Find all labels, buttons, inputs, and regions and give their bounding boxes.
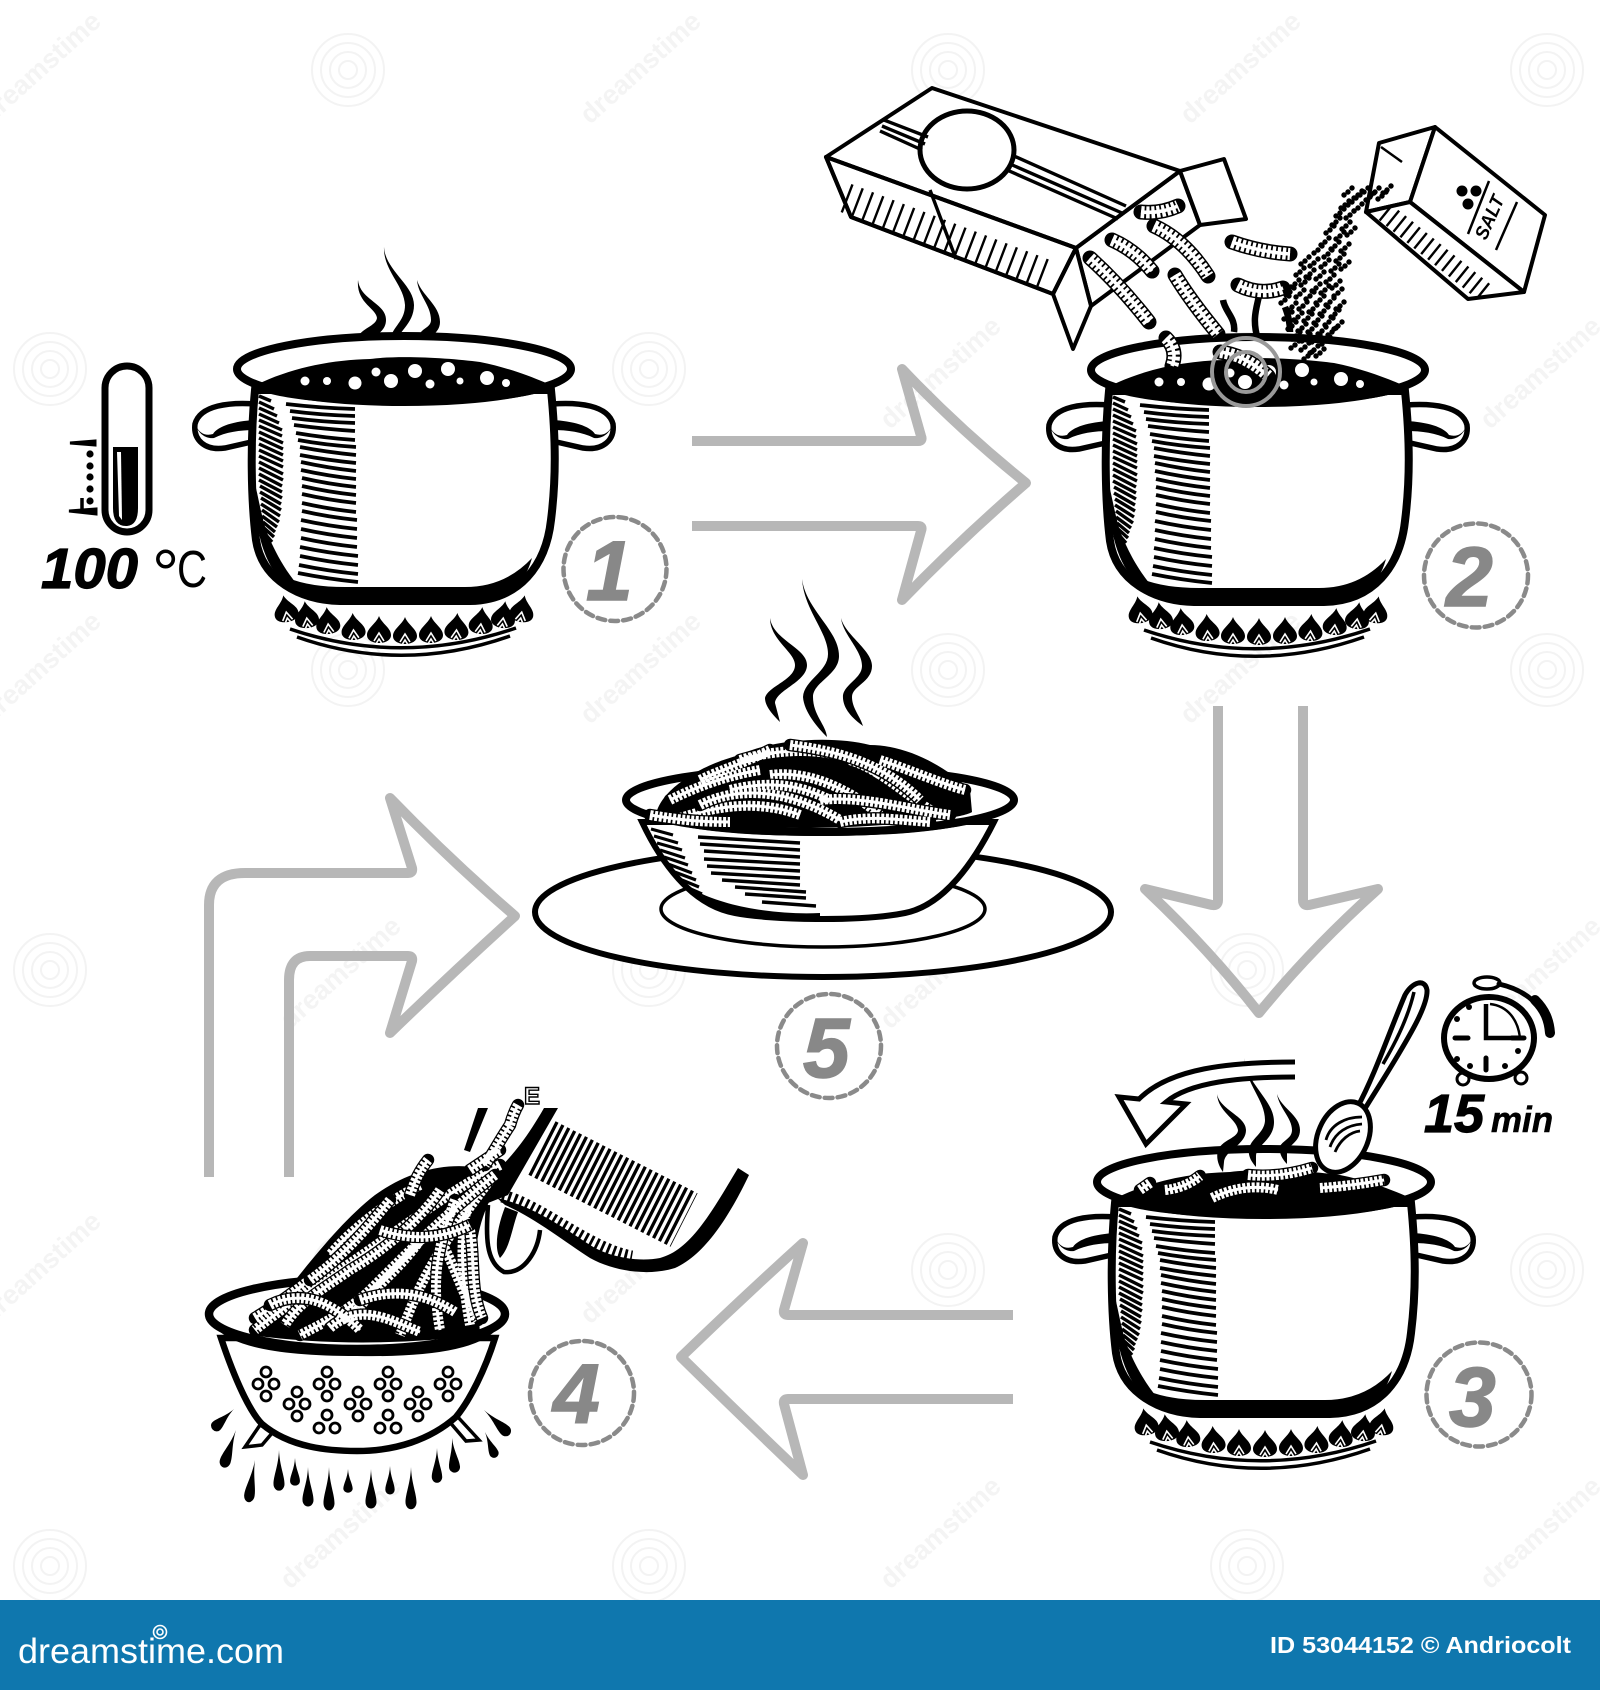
arrow: step 1 to step 2	[692, 369, 1026, 600]
pasta in pot	[1140, 1168, 1384, 1198]
icon: salt box	[1366, 127, 1545, 299]
icon: steam	[1217, 1058, 1300, 1172]
timer label	[1424, 1084, 1553, 1144]
icon: pot on burner	[1049, 337, 1467, 656]
footer logo: dreamstime.com	[18, 1632, 284, 1671]
pasta pouring into colander: E	[524, 1083, 540, 1110]
panel: step 4 drain in colander	[209, 1083, 749, 1510]
temperature label	[41, 536, 207, 612]
step number 5	[777, 994, 881, 1098]
watermark pattern: dreamstime	[874, 1471, 1007, 1594]
temperature label: 100	[41, 537, 138, 601]
step number 2	[1424, 524, 1528, 628]
icon: tilted pot	[464, 1108, 749, 1272]
icon: pot on burner	[1055, 1149, 1473, 1468]
icon: plate	[535, 847, 1111, 977]
step number 1: 1	[586, 524, 633, 618]
icon: salt box: SALT	[1471, 191, 1510, 243]
watermark pattern: dreamstime	[574, 1206, 707, 1329]
icon: spoon	[1305, 983, 1427, 1181]
step number 3	[1426, 1342, 1532, 1446]
watermark pattern: dreamstime	[874, 911, 1007, 1034]
icon: bowl of pasta	[626, 740, 1014, 919]
watermark pattern: dreamstime	[574, 606, 707, 729]
timer label: 15	[1424, 1084, 1485, 1144]
liquid bubbles	[1154, 363, 1364, 390]
footer band	[0, 1600, 1600, 1690]
step number 5: 5	[803, 1001, 851, 1095]
falling salt grains	[1281, 186, 1391, 359]
panel: step 3 stir and simmer	[1055, 977, 1553, 1468]
footer image id: ID 53044152 © Andriocolt	[1270, 1632, 1571, 1658]
arrow: step 2 to step 3	[1145, 706, 1378, 1013]
pasta pouring into colander	[250, 1083, 540, 1342]
temperature label: °	[152, 536, 179, 612]
step number 2: 2	[1444, 530, 1493, 624]
falling pasta	[1090, 206, 1290, 376]
watermark pattern: dreamstime	[1174, 1206, 1307, 1329]
temperature label: C	[177, 541, 207, 599]
watermark pattern: dreamstime	[874, 311, 1007, 434]
panel: step 2 add pasta and salt	[826, 88, 1545, 656]
panel: step 5 serve	[535, 579, 1111, 1098]
liquid bubbles	[300, 362, 510, 390]
step number 4	[530, 1341, 634, 1445]
arrow: step 4 to step 5	[209, 798, 515, 1177]
step number 1	[564, 517, 666, 621]
icon: stir arrow	[1119, 1062, 1295, 1144]
icon: steam	[356, 247, 440, 360]
icon: steam	[765, 579, 872, 737]
water drops	[209, 1405, 513, 1510]
icon: pasta box	[826, 88, 1246, 349]
watermark pattern: dreamstime	[274, 911, 407, 1034]
icon: pot on burner	[195, 336, 613, 655]
arrow: step 3 to step 4	[681, 1243, 1013, 1475]
watermark pattern: dreamstime	[574, 6, 707, 129]
icon: colander	[209, 1279, 505, 1451]
icon: thermometer	[69, 366, 149, 532]
icon: alarm clock	[1444, 977, 1550, 1085]
watermark spiral on pot	[1212, 338, 1280, 406]
watermark pattern: dreamstime	[1174, 6, 1307, 129]
step number 3: 3	[1449, 1350, 1496, 1444]
watermark pattern: dreamstime	[274, 1471, 407, 1594]
timer label: min	[1491, 1099, 1553, 1140]
watermark pattern: dreamstime	[1174, 606, 1307, 729]
panel: step 1 boil water	[41, 247, 666, 655]
step number 4: 4	[551, 1347, 600, 1441]
icon: steam	[1223, 296, 1290, 340]
